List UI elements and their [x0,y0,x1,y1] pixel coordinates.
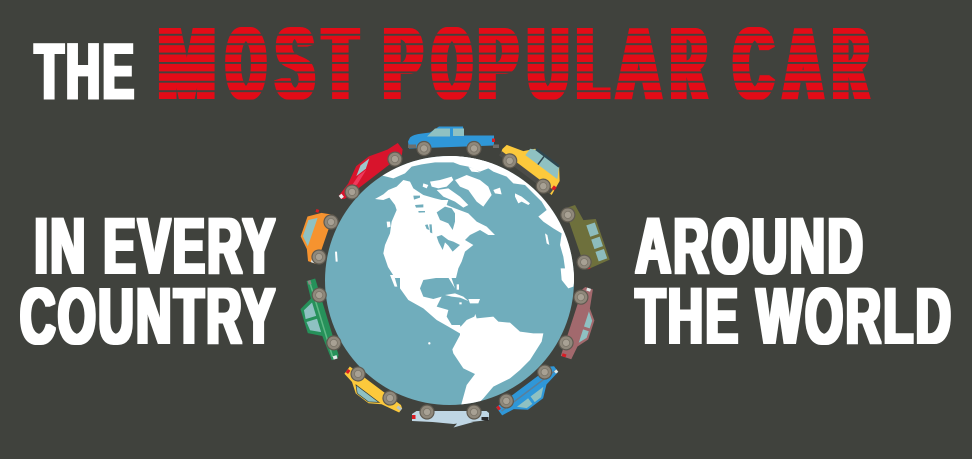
globe [325,148,583,407]
title: MOST POPULAR CAR: A [618,6,660,121]
heading: IN EVERY: IN EVERY [34,202,277,290]
title: MOST POPULAR CAR: R [672,6,705,121]
heading: COUNTRY: COUNTRY [20,272,277,360]
car: blue pickup [408,126,499,156]
title: MOST POPULAR CAR: M [159,6,214,121]
title: MOST POPULAR CAR: O [228,6,264,121]
title: MOST POPULAR CAR: O [434,6,470,121]
car: green sedan [293,277,346,365]
car: olive jeep [558,200,610,272]
car: yellow SUV [495,132,569,199]
car: orange hatchback [294,207,341,267]
car: yellow coupe [339,361,407,421]
title: MOST POPULAR CAR: T [324,6,356,121]
title: MOST POPULAR CAR: P [385,6,421,121]
title: MOST POPULAR CAR: L [578,6,607,121]
title: THE: THE [35,27,136,115]
car: silver sports car [412,404,489,428]
title: MOST POPULAR CAR: U [529,6,567,121]
title: MOST POPULAR CAR: C [735,6,772,121]
title: MOST POPULAR CAR: A [784,6,822,121]
car: blue sedan [492,359,565,424]
car: mauve sedan [555,284,603,362]
text: R [834,6,867,121]
title: MOST POPULAR CAR: P [480,6,516,121]
car: red sports car [331,137,409,206]
title: MOST POPULAR CAR: S [277,6,313,121]
